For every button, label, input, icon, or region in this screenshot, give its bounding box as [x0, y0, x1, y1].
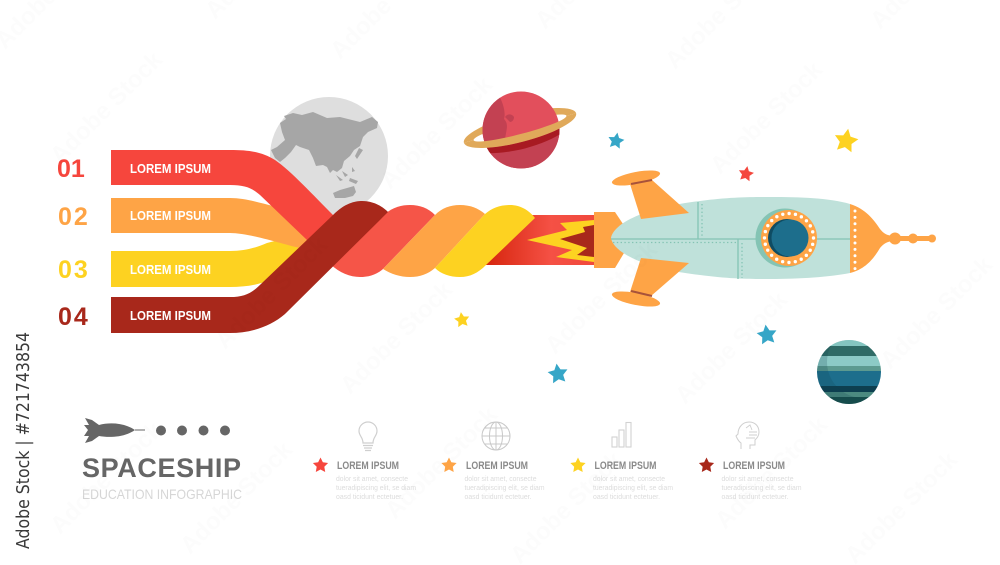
- item 4 body: tueradipiscing elit, se diam: [722, 485, 802, 492]
- rocket nose: [850, 204, 936, 273]
- number 01: 01: [57, 155, 85, 183]
- icon: light bulb: [359, 422, 377, 450]
- label 03: LOREM IPSUM: [130, 263, 211, 277]
- star bullet red: [313, 458, 328, 472]
- item 2 body: dolor sit amet, consecte: [464, 476, 537, 483]
- icon: striped planet: [817, 340, 881, 404]
- item 4 heading: LOREM IPSUM: [723, 460, 785, 472]
- item 1: [313, 458, 416, 501]
- rocket: [594, 167, 936, 310]
- number 02: 02: [58, 203, 90, 231]
- item 3 body: [593, 476, 673, 501]
- star: yellow small: [453, 311, 470, 327]
- item 2 body: tueradipiscing elit, se diam: [464, 485, 545, 492]
- item 2 body: [464, 476, 545, 501]
- item 3 heading: LOREM IPSUM: [594, 460, 656, 472]
- item 4 body: [722, 476, 802, 501]
- twist: coral segment: [330, 205, 435, 277]
- ribbon: 01 red: [111, 150, 340, 250]
- item 3 body: dolor sit amet, consecte: [593, 476, 665, 483]
- item 3: [570, 458, 673, 501]
- ribbon: exhaust: [484, 215, 596, 265]
- rocket nozzle: [594, 212, 624, 268]
- star: blue bottom: [547, 362, 569, 384]
- label 04: LOREM IPSUM: [130, 309, 211, 323]
- icon: flame: [527, 220, 594, 262]
- twist: yellow segment: [435, 205, 535, 277]
- item 3 body: tueradipiscing elit, se diam: [593, 485, 673, 492]
- item 1 body: tueradipiscing elit, se diam: [336, 485, 416, 492]
- twist: orange segment: [383, 205, 485, 277]
- dots row: [156, 426, 230, 436]
- icon: head: [736, 422, 759, 449]
- star: red: [737, 165, 755, 182]
- ribbon: 04 dark red: [111, 201, 388, 333]
- item 2 heading: LOREM IPSUM: [466, 460, 528, 472]
- icon: earth globe: [270, 97, 388, 215]
- small rocket icon: [84, 418, 145, 443]
- ribbon: 03 yellow: [111, 237, 300, 287]
- star: blue right: [756, 323, 778, 345]
- item 1 body: oasd ticidunt ectetuer.: [336, 494, 403, 501]
- rocket panel lines: [611, 202, 850, 279]
- item 2: [441, 458, 545, 501]
- number 04: 04: [58, 303, 90, 331]
- number 03: 03: [58, 256, 90, 284]
- label 02: LOREM IPSUM: [130, 209, 211, 223]
- star: yellow top right: [833, 127, 860, 153]
- icon: globe: [482, 422, 510, 450]
- star bullet orange: [441, 458, 457, 472]
- item 4: [699, 458, 802, 501]
- rocket body: [611, 197, 850, 279]
- item 4 body: oasd ticidunt ectetuer.: [722, 494, 789, 501]
- icon: bar chart: [612, 422, 631, 447]
- star bullet dark red: [699, 458, 714, 472]
- subtitle: EDUCATION INFOGRAPHIC: [82, 486, 242, 502]
- stock id text: Adobe Stock | #721743854: [14, 332, 34, 549]
- item 1 body: dolor sit amet, consecte: [336, 476, 408, 483]
- item 1 heading: LOREM IPSUM: [337, 460, 399, 472]
- rocket porthole: [756, 208, 817, 268]
- item 2 body: oasd ticidunt ectetuer.: [464, 494, 532, 501]
- item 3 body: oasd ticidunt ectetuer.: [593, 494, 660, 501]
- item 1 body: [336, 476, 416, 501]
- star: blue top: [607, 131, 625, 149]
- rocket bottom fin: [611, 258, 689, 310]
- rocket top fin: [611, 167, 689, 219]
- label 01: LOREM IPSUM: [130, 162, 211, 176]
- icon: ringed planet: [464, 92, 576, 168]
- star bullet yellow: [570, 458, 586, 472]
- ribbon: 02 orange: [111, 198, 312, 248]
- item 4 body: dolor sit amet, consecte: [722, 476, 794, 483]
- title: SPACESHIP: [82, 453, 241, 483]
